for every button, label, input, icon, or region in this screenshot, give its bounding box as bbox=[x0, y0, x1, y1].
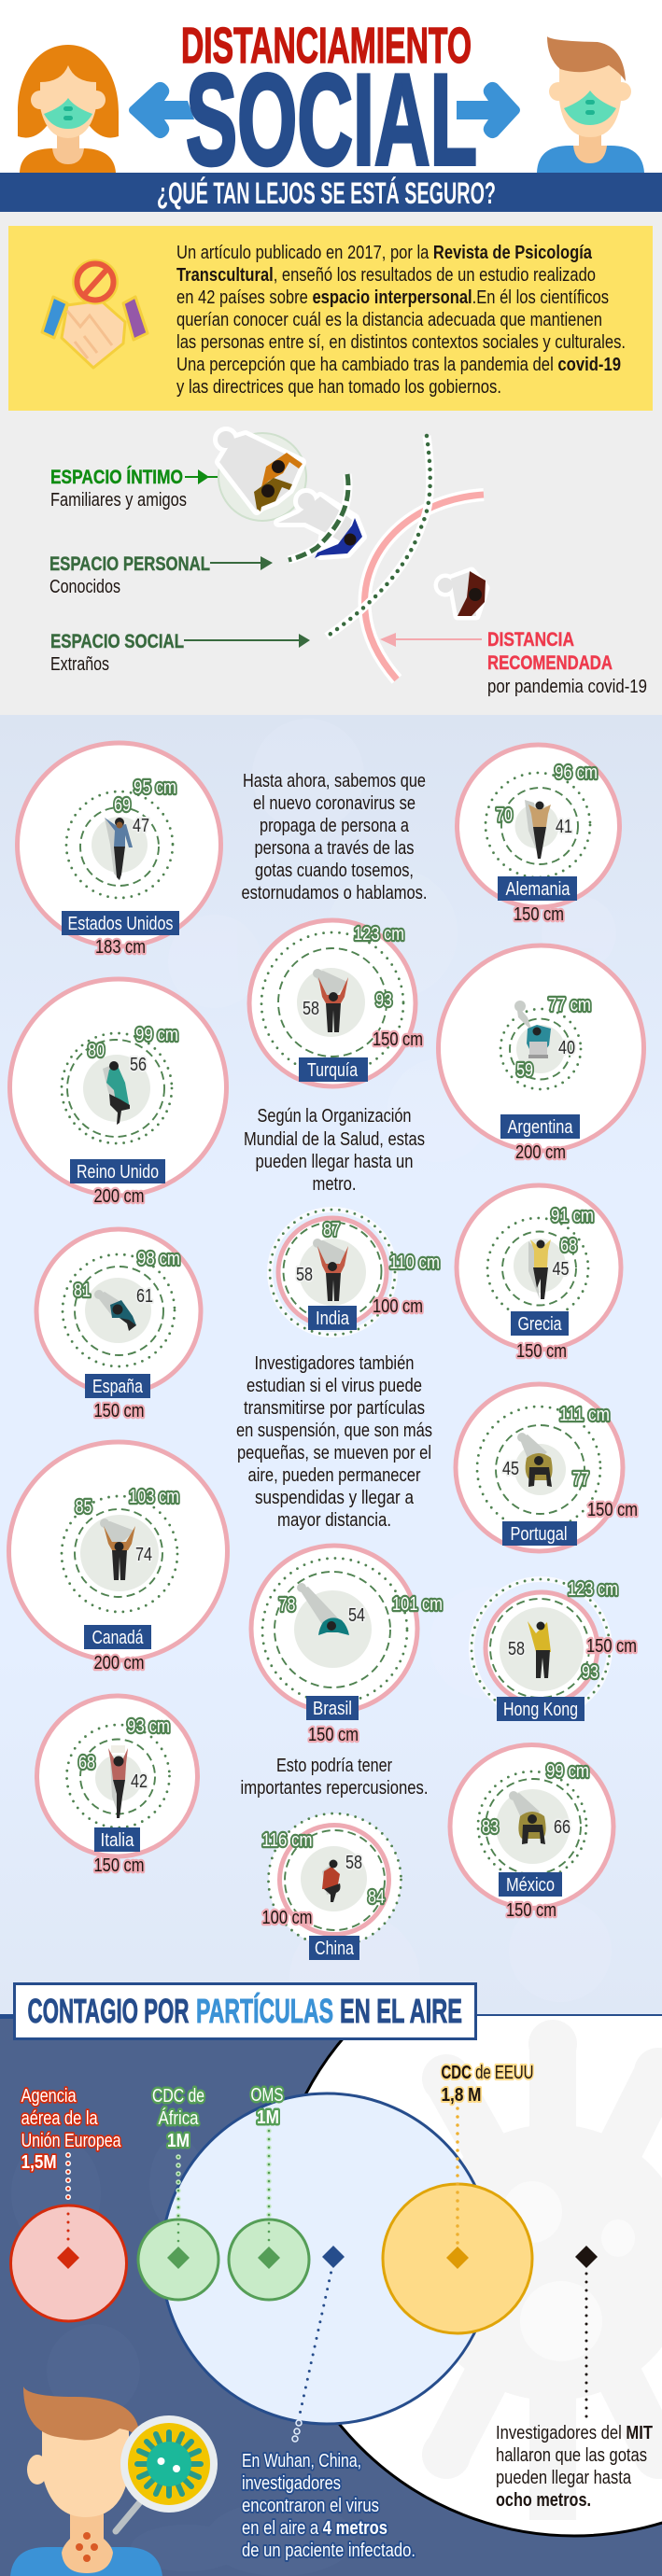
circle: Grecia: Grecia bbox=[517, 1314, 562, 1335]
text: hasta ahora: Hasta ahora, sabemos que bbox=[243, 771, 426, 791]
circle: CDC de África 1M: CDC de bbox=[152, 2086, 204, 2107]
diagram: personal spaces bbox=[49, 431, 647, 697]
shadow and person: social bbox=[438, 571, 486, 616]
circle: Brasil: 150 cm bbox=[308, 1725, 359, 1745]
circle: Hong Kong bbox=[472, 1579, 637, 1721]
subtitle band bbox=[0, 173, 662, 212]
circle: Reino Unido: Reino Unido bbox=[77, 1162, 159, 1183]
circle: Portugal: 150 cm bbox=[587, 1500, 638, 1520]
circle: España bbox=[36, 1229, 201, 1421]
circle: OMS 1M bbox=[229, 2085, 309, 2300]
icon: no handshake bbox=[42, 259, 148, 368]
text: según la OMS: Mundial de la Salud, estas bbox=[244, 1129, 425, 1150]
icon: woman with mask bbox=[18, 45, 119, 173]
marker: MIT ocho metros: ocho metros. bbox=[496, 2490, 591, 2511]
circle: Italia bbox=[37, 1696, 198, 1876]
icon: man with magnifier and virus bbox=[10, 2387, 218, 2576]
circle: Canadá: 74 bbox=[135, 1545, 152, 1565]
circle: Grecia bbox=[457, 1185, 621, 1362]
circle: Turquía: 58 bbox=[303, 999, 319, 1019]
circle: Agencia aérea UE 1,5M: 1,5M bbox=[21, 2152, 57, 2173]
circle: Turquía: 93 bbox=[375, 990, 392, 1011]
circle: Alemania: 96 cm bbox=[555, 763, 598, 783]
text: investigadores: mayor distancia. bbox=[277, 1510, 391, 1531]
circle: Estados Unidos bbox=[17, 743, 220, 958]
circle: Alemania: 70 bbox=[496, 805, 513, 826]
circle: Reino Unido: 200 cm bbox=[93, 1186, 144, 1207]
circle: Reino Unido: 56 bbox=[130, 1055, 147, 1075]
text: según la OMS bbox=[244, 1106, 425, 1195]
text: hasta ahora: gotas cuando tosemos, bbox=[255, 861, 414, 881]
marker: MIT ocho metros: Investigadores del MIT bbox=[496, 2423, 653, 2443]
label: distancia recomendada bbox=[380, 629, 647, 697]
circle: Argentina: 59 bbox=[516, 1060, 533, 1081]
heading: contagio por partículas en el aire: EN EL AIRE bbox=[340, 1992, 462, 2030]
intro text: Una percepción que ha cambiado tras la pandemia del covid-19 bbox=[176, 355, 621, 375]
label: espacio social: Extraños bbox=[50, 654, 109, 675]
marker: Wuhan 4 metros: investigadores bbox=[242, 2473, 341, 2494]
circle: Grecia: 45 bbox=[553, 1259, 570, 1280]
circle: India: 58 bbox=[296, 1265, 313, 1285]
circle: Italia: 93 cm bbox=[127, 1716, 170, 1737]
text: según la OMS: metro. bbox=[312, 1174, 357, 1195]
circle: Agencia aérea UE 1,5M bbox=[11, 2086, 127, 2321]
circle: CDC de África 1M: África bbox=[159, 2107, 199, 2129]
circle: Argentina: 77 cm bbox=[548, 995, 591, 1015]
circle: Grecia: 150 cm bbox=[516, 1341, 567, 1362]
marker: Wuhan 4 metros bbox=[242, 2246, 416, 2561]
circle: India: 87 bbox=[323, 1220, 340, 1240]
circle: Argentina: Argentina bbox=[508, 1117, 573, 1138]
text: investigadores: en suspensión, que son más bbox=[236, 1421, 432, 1441]
circle: Canadá bbox=[9, 1442, 228, 1673]
circle: Reino Unido bbox=[9, 979, 226, 1207]
circle: China: China bbox=[315, 1939, 355, 1959]
circle: CDC de África 1M: 1M bbox=[167, 2131, 190, 2151]
circle: China: 84 bbox=[368, 1887, 385, 1908]
circle: Grecia: 68 bbox=[560, 1236, 577, 1256]
circle: Alemania: 41 bbox=[556, 817, 572, 837]
intro text: en 42 países sobre espacio interpersonal.En él los científicos bbox=[176, 287, 609, 308]
circle: Italia: 42 bbox=[131, 1771, 148, 1792]
marker: Wuhan 4 metros: En Wuhan, China, bbox=[242, 2451, 361, 2471]
circle: Portugal: 111 cm bbox=[559, 1405, 610, 1425]
arrow: right bbox=[457, 82, 520, 138]
circle: India: 100 cm bbox=[373, 1296, 423, 1317]
circle: Reino Unido: 80 bbox=[88, 1041, 105, 1061]
circle: CDC de África 1M bbox=[138, 2086, 218, 2300]
label: espacio personal bbox=[49, 553, 273, 597]
circle: Brasil: 54 bbox=[348, 1605, 365, 1626]
text: hasta ahora: propaga de persona a bbox=[260, 816, 410, 836]
heading: contagio por partículas en el aire bbox=[15, 1984, 476, 2038]
circle: India: India bbox=[316, 1309, 350, 1329]
circle: España: 150 cm bbox=[93, 1401, 144, 1421]
circle: Agencia aérea UE 1,5M: aérea de la bbox=[21, 2108, 98, 2129]
personal space dashed arc bbox=[289, 474, 348, 560]
label: espacio intimo: ESPACIO ÍNTIMO bbox=[50, 467, 183, 488]
circle: Estados Unidos: 69 bbox=[114, 795, 131, 816]
arrow: left bbox=[129, 82, 194, 138]
circle: Portugal: Portugal bbox=[510, 1524, 568, 1545]
circle: Reino Unido: 99 cm bbox=[135, 1025, 178, 1045]
title: Distanciamiento: DISTANCIAMIENTO bbox=[181, 18, 472, 74]
heading: contagio por partículas en el aire: PARTÍCULAS bbox=[196, 1992, 333, 2030]
shadow and people: intimate bbox=[218, 431, 303, 511]
circle: Portugal: 45 bbox=[502, 1459, 519, 1479]
circle: Grecia: 91 cm bbox=[551, 1206, 594, 1226]
circle: Italia: 150 cm bbox=[93, 1855, 144, 1876]
circle: Estados Unidos: 47 bbox=[133, 816, 149, 836]
circle: Brasil: 78 bbox=[278, 1595, 295, 1616]
circle: Canadá: 103 cm bbox=[129, 1487, 179, 1507]
circle: Estados Unidos: 95 cm bbox=[134, 777, 176, 798]
circle: India bbox=[270, 1210, 440, 1335]
circle: México: 66 bbox=[554, 1817, 570, 1838]
intro text: Un artículo publicado en 2017, por la Revista de Psicología bbox=[176, 243, 593, 263]
label: espacio personal: Conocidos bbox=[49, 577, 120, 597]
marker: Wuhan 4 metros: encontraron el virus bbox=[242, 2496, 379, 2516]
circle: OMS 1M: 1M bbox=[257, 2107, 279, 2128]
circle: CDC de EEUU 1,8 M bbox=[383, 2063, 534, 2333]
recommended distance arc bbox=[365, 495, 484, 679]
label: espacio social bbox=[50, 631, 310, 675]
social space dotted arc bbox=[327, 436, 430, 637]
text: investigadores bbox=[236, 1353, 432, 1531]
large blue circle bbox=[162, 2093, 492, 2424]
circle: India: 110 cm bbox=[389, 1253, 440, 1273]
label: espacio intimo bbox=[50, 467, 218, 511]
circle: China bbox=[261, 1813, 401, 1960]
marker: Wuhan 4 metros: de un paciente infectado. bbox=[242, 2541, 416, 2561]
text: investigadores: Investigadores también bbox=[254, 1353, 415, 1374]
circle: Argentina bbox=[439, 945, 644, 1163]
panel: intro bbox=[8, 226, 653, 411]
circle: Hong Kong: 93 bbox=[582, 1662, 599, 1683]
icon: man with mask bbox=[537, 36, 644, 173]
circle: Hong Kong: 123 cm bbox=[568, 1579, 618, 1600]
text: hasta ahora bbox=[241, 771, 428, 903]
circle: Alemania bbox=[458, 745, 620, 925]
text: investigadores: estudian si el virus puede bbox=[246, 1376, 422, 1396]
intro text: Transcultural, enseñó los resultados de un estudio realizado bbox=[176, 265, 596, 286]
circle: China: 58 bbox=[345, 1853, 362, 1873]
circle: Alemania: Alemania bbox=[506, 879, 570, 900]
circle: México: 99 cm bbox=[546, 1761, 589, 1782]
label: espacio social: ESPACIO SOCIAL bbox=[50, 631, 184, 652]
text: esto podría tener: Esto podría tener bbox=[276, 1756, 392, 1776]
text: investigadores: suspendidas y llegar a bbox=[255, 1488, 415, 1508]
label: distancia recomendada: RECOMENDADA bbox=[487, 652, 613, 674]
circle: Argentina: 200 cm bbox=[515, 1142, 566, 1163]
heading: contagio por partículas en el aire: CONTAGIO POR bbox=[28, 1992, 189, 2030]
circle: España: 81 bbox=[74, 1281, 91, 1301]
circle: España: 61 bbox=[136, 1286, 153, 1307]
circle: España: 98 cm bbox=[137, 1249, 180, 1269]
label: espacio intimo: Familiares y amigos bbox=[50, 490, 187, 511]
circle: Brasil: 101 cm bbox=[392, 1594, 443, 1615]
circle: Brasil bbox=[251, 1546, 443, 1745]
label: distancia recomendada: DISTANCIA bbox=[487, 629, 574, 651]
circle: China: 100 cm bbox=[261, 1908, 312, 1928]
marker: MIT ocho metros bbox=[496, 2246, 653, 2511]
circle: CDC de EEUU 1,8 M: CDC de EEUU bbox=[441, 2063, 534, 2083]
circle: Portugal: 77 bbox=[572, 1469, 589, 1490]
text: investigadores: transmitirse por partículas bbox=[244, 1398, 425, 1419]
circle: Agencia aérea UE 1,5M: Unión Europea bbox=[21, 2131, 121, 2151]
circle: Turquía bbox=[249, 920, 423, 1086]
text: hasta ahora: estornudamos o hablamos. bbox=[241, 883, 428, 903]
text: hasta ahora: el nuevo coronavirus se bbox=[253, 793, 416, 814]
marker: Wuhan 4 metros: en el aire a 4 metros bbox=[242, 2518, 387, 2539]
big white circle with virus watermark bbox=[304, 2016, 662, 2537]
circle: Argentina: 40 bbox=[558, 1038, 575, 1058]
intro text bbox=[176, 243, 626, 398]
circle: Turquía: Turquía bbox=[307, 1060, 359, 1081]
circle: Canadá: 200 cm bbox=[93, 1653, 144, 1673]
circle: Turquía: 150 cm bbox=[373, 1029, 423, 1050]
circle: CDC de EEUU 1,8 M: 1,8 M bbox=[441, 2085, 482, 2106]
circle: Hong Kong: 150 cm bbox=[586, 1636, 637, 1657]
marker: MIT ocho metros: pueden llegar hasta bbox=[496, 2468, 632, 2488]
circle: China: 116 cm bbox=[261, 1830, 312, 1851]
circle: México bbox=[450, 1745, 613, 1921]
circle: Italia: Italia bbox=[101, 1830, 134, 1851]
circle: Italia: 68 bbox=[78, 1753, 95, 1773]
circle: México: 83 bbox=[482, 1817, 499, 1838]
circle: Estados Unidos: 183 cm bbox=[95, 937, 146, 958]
circle: Hong Kong: 58 bbox=[508, 1639, 525, 1659]
circle: Brasil: Brasil bbox=[313, 1699, 352, 1719]
circle: Canadá: 85 bbox=[75, 1497, 92, 1518]
text: investigadores: pequeñas, se mueven por el bbox=[237, 1443, 431, 1463]
text: investigadores: aire, pueden permanecer bbox=[248, 1465, 421, 1486]
circle: OMS 1M: OMS bbox=[250, 2085, 284, 2106]
circle: Turquía: 123 cm bbox=[354, 924, 404, 945]
section background: airborne particles bbox=[0, 2014, 662, 2576]
label: espacio personal: ESPACIO PERSONAL bbox=[49, 553, 210, 575]
circle: Alemania: 150 cm bbox=[514, 904, 564, 925]
shadow and person: personal bbox=[278, 493, 362, 558]
text: esto podría tener bbox=[241, 1756, 428, 1799]
circle: Hong Kong: Hong Kong bbox=[503, 1700, 578, 1720]
title: Social: SOCIAL bbox=[186, 48, 477, 192]
circle: Canadá: Canadá bbox=[92, 1628, 144, 1648]
text: según la OMS: pueden llegar hasta un bbox=[256, 1152, 413, 1172]
circle: Portugal bbox=[456, 1384, 638, 1551]
circle: España: España bbox=[92, 1377, 144, 1397]
circle: México: México bbox=[506, 1875, 555, 1896]
text: esto podría tener: importantes repercusiones. bbox=[241, 1778, 428, 1799]
circle: Estados Unidos: Estados Unidos bbox=[67, 914, 174, 934]
circle: México: 150 cm bbox=[506, 1900, 556, 1921]
text: hasta ahora: persona a través de las bbox=[254, 838, 415, 859]
circle: Agencia aérea UE 1,5M: Agencia bbox=[21, 2086, 77, 2107]
text: según la OMS: Según la Organización bbox=[258, 1106, 411, 1127]
intro text: y las directrices que han tomado los gobiernos. bbox=[176, 377, 501, 398]
